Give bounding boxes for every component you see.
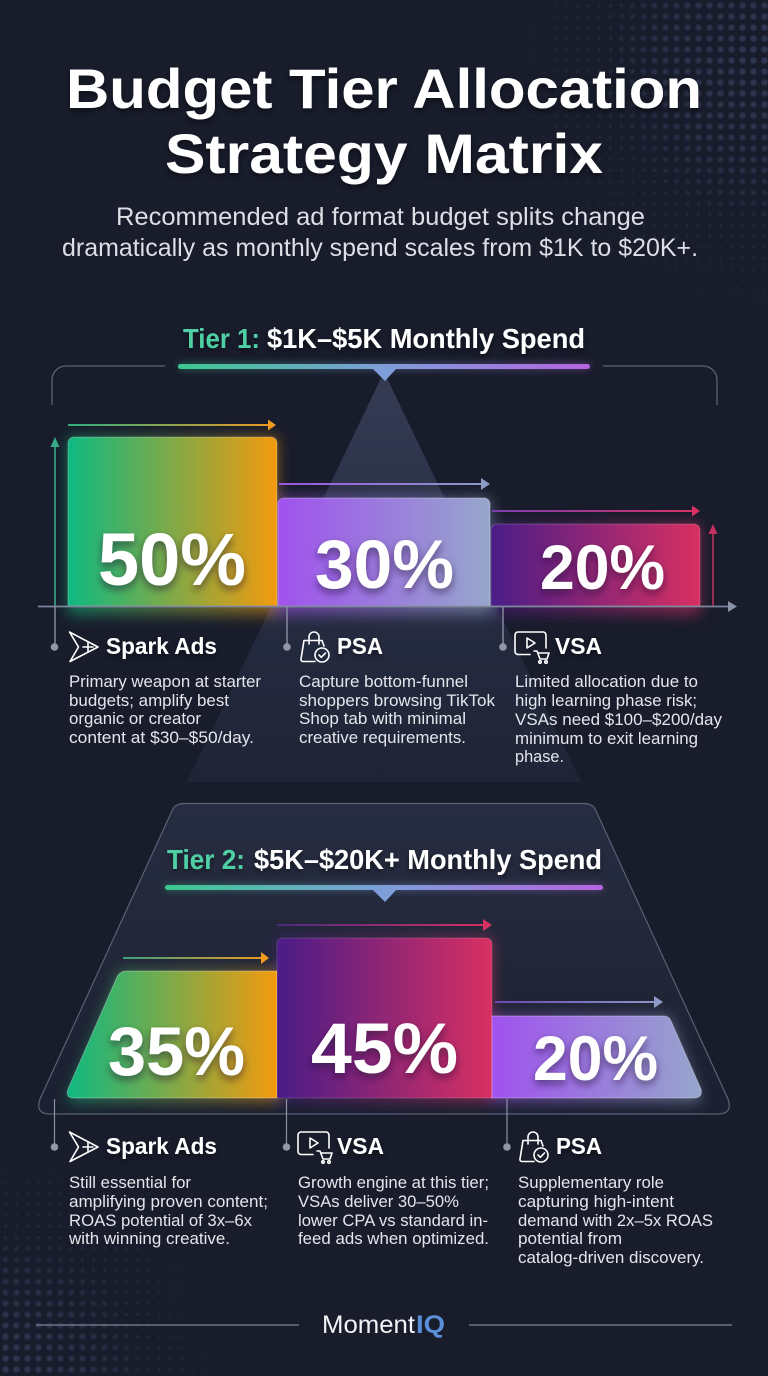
footer [36, 1311, 732, 1339]
brand logo: Moment [322, 1311, 415, 1339]
bar: 35% [67, 971, 277, 1098]
tier 2 rule [165, 885, 603, 902]
value: 20%: 20% [540, 533, 665, 603]
tier 1 column: psa: shoppers browsing TikTok [299, 692, 496, 710]
icon: spark arrow [70, 1132, 98, 1162]
tier 2 column: spark ads [51, 1099, 268, 1248]
title: Budget Tier Allocation [66, 57, 702, 120]
tier 1 column: psa: creative requirements. [299, 729, 466, 747]
value: 50%: 50% [98, 518, 246, 601]
tier 2 column: psa: demand with 2x–5x ROAS [518, 1212, 713, 1230]
tier 1 column: psa: Shop tab with minimal [299, 710, 466, 728]
bar: 20% [491, 524, 700, 606]
tier 1 column: vsa: VSAs need $100–$200/day [515, 711, 723, 729]
tier 1 column: vsa [499, 607, 723, 766]
tier 1 column: psa: Capture bottom-funnel [299, 673, 468, 691]
tier 1 column: spark ads: organic or creator [69, 710, 202, 728]
value: 20%: 20% [533, 1024, 658, 1094]
subtitle: Recommended ad format budget splits change [116, 203, 645, 231]
tier 1 column: spark ads: content at $30–$50/day. [69, 729, 254, 747]
tier 1 column: vsa: high learning phase risk; [515, 692, 697, 710]
tier 1 column: vsa: VSA [555, 633, 602, 659]
tier 2 column: psa: potential from [518, 1230, 622, 1248]
subtitle [62, 203, 698, 262]
icon: video cart [298, 1132, 332, 1163]
bar: 45% [277, 938, 492, 1098]
tier 2 column: spark ads: with winning creative. [68, 1230, 230, 1248]
tier 2 column: vsa: lower CPA vs standard in- [298, 1212, 488, 1230]
spotlight beam [187, 372, 581, 782]
subtitle: dramatically as monthly spend scales from $1K to $20K+. [62, 234, 698, 262]
tier 2 column: psa: capturing high-intent [518, 1193, 674, 1211]
tier 2 column: vsa: VSA [337, 1133, 384, 1159]
tier 1 column: spark ads: budgets; amplify best [69, 692, 229, 710]
tier 2 column: vsa: VSAs deliver 30–50% [298, 1193, 459, 1211]
value: 35%: 35% [108, 1013, 245, 1090]
tier 1 column: vsa: minimum to exit learning [515, 730, 698, 748]
tier 1 arrows [50, 420, 718, 606]
tier 2 column: spark ads: Spark Ads [106, 1133, 217, 1159]
tier 1 column: spark ads: Primary weapon at starter [69, 673, 262, 691]
tier 1 bracket [52, 366, 717, 405]
tier 2 bar chart [67, 938, 702, 1102]
tier 1 column: vsa: phase. [515, 748, 564, 766]
bar: 20% [492, 1016, 701, 1098]
bar glow [67, 938, 702, 1102]
tier 2 column: psa: catalog-driven discovery. [518, 1249, 704, 1267]
tier 2 heading: Tier 2: [167, 844, 245, 875]
tier 1 rule [178, 364, 590, 381]
title: Strategy Matrix [165, 122, 603, 185]
tier 2 column: spark ads: ROAS potential of 3x–6x [69, 1212, 253, 1230]
tier 1 column: spark ads: Spark Ads [106, 633, 217, 659]
icon: shopping bag [520, 1132, 548, 1162]
tier 2 column: spark ads: amplifying proven content; [69, 1193, 268, 1211]
tier 2 panel [39, 804, 729, 1114]
tier 1 column: psa [283, 607, 496, 747]
tier 2 column: psa: PSA [556, 1133, 602, 1159]
icon: shopping bag [301, 632, 329, 662]
icon: spark arrow [70, 632, 98, 662]
title [66, 57, 702, 185]
bar glow [68, 437, 700, 615]
tier 1 column: vsa: Limited allocation due to [515, 673, 698, 691]
bar: 30% [278, 498, 490, 606]
tier 1 column: spark ads [51, 607, 262, 747]
bar: 50% [68, 437, 277, 606]
brand logo: IQ [416, 1311, 445, 1339]
tier 2 column: psa [503, 1099, 713, 1267]
tier 2 column: psa: Supplementary role [518, 1174, 664, 1192]
tier 1 bar chart [68, 437, 700, 615]
halftone dots bottom left [2, 1183, 193, 1373]
halftone dots top right [546, 2, 768, 282]
tier 1 column: psa: PSA [337, 633, 383, 659]
tier 2 column: vsa [283, 1099, 489, 1248]
icon: video cart [515, 632, 549, 663]
tier 1 heading: $1K–$5K Monthly Spend [267, 323, 585, 354]
tier 1 heading: Tier 1: [183, 323, 260, 354]
value: 45%: 45% [311, 1010, 458, 1089]
tier 2 column: spark ads: Still essential for [69, 1174, 192, 1192]
tier 2 heading: $5K–$20K+ Monthly Spend [254, 844, 602, 875]
tier 2 column: vsa: Growth engine at this tier; [298, 1174, 489, 1192]
tier 2 arrows [123, 919, 663, 1008]
value: 30%: 30% [315, 526, 454, 603]
tier 2 column: vsa: feed ads when optimized. [298, 1230, 489, 1248]
tier 1 axis [38, 601, 737, 612]
